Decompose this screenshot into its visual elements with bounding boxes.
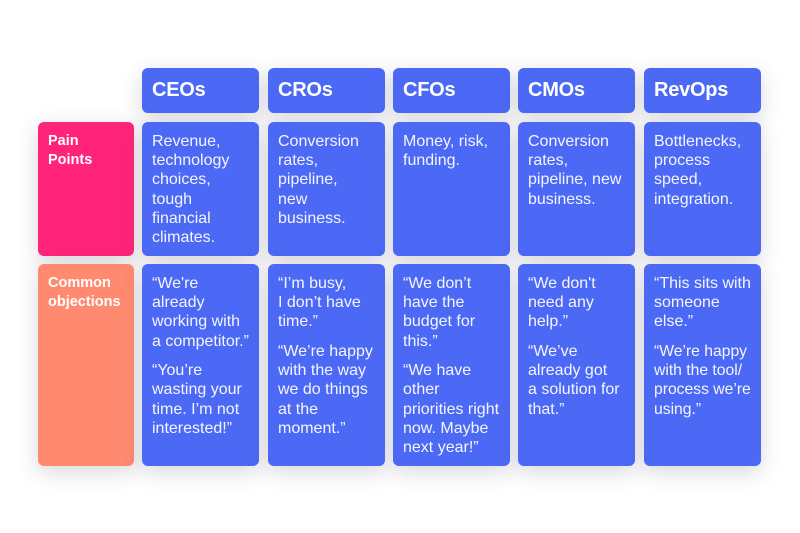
objections: CROs: moment.”	[278, 420, 346, 437]
pain points: RevOps: speed,	[654, 171, 702, 188]
objections: CFOs: “We have	[403, 362, 471, 379]
header: CFOs	[393, 68, 510, 113]
pain points: CEOs: financial	[152, 210, 211, 227]
objections: CFOs: “We don’t	[403, 275, 471, 292]
objections: CROs: I don’t have	[278, 294, 361, 311]
objections: CROs	[268, 264, 385, 466]
pain points: CROs: rates,	[278, 152, 318, 169]
objections: RevOps: “This sits with	[654, 275, 751, 292]
header: CROs	[268, 68, 385, 113]
pain points: CFOs: funding.	[403, 152, 460, 169]
pain points: CROs: new	[278, 191, 307, 208]
objections: RevOps: process we’re	[654, 381, 751, 398]
objections: CROs: with the way	[278, 362, 366, 379]
objections: CMOs	[518, 264, 635, 466]
pain points: CMOs	[518, 122, 635, 256]
pain points: RevOps	[644, 122, 761, 256]
objections: CMOs: already got	[528, 362, 607, 379]
pain points: CEOs: technology	[152, 152, 229, 169]
objections: CEOs: “We're	[152, 275, 198, 292]
objections: CEOs: interested!”	[152, 420, 232, 437]
objections: CMOs: “We’ve	[528, 343, 578, 360]
pain points: CFOs: Money, risk,	[403, 133, 488, 150]
pain points: CEOs: Revenue,	[152, 133, 220, 150]
objections: CMOs: need any	[528, 294, 594, 311]
pain points: CROs: business.	[278, 210, 346, 227]
pain points: CMOs: business.	[528, 191, 596, 208]
pain points: CMOs: pipeline, new	[528, 171, 621, 188]
objections: RevOps: using.”	[654, 401, 701, 418]
objections: RevOps	[644, 264, 761, 466]
objections: CEOs: working with	[152, 313, 240, 330]
pain points: CEOs	[142, 122, 259, 256]
objections: CMOs: “We don't	[528, 275, 596, 292]
header: CFOs: CFOs	[403, 79, 455, 101]
objections: CROs: time.”	[278, 313, 318, 330]
objections: CEOs	[142, 264, 259, 466]
pain points: CEOs: climates.	[152, 229, 215, 246]
pain points: RevOps: Bottlenecks,	[654, 133, 741, 150]
header: CMOs	[518, 68, 635, 113]
pain points: CFOs	[393, 122, 510, 256]
objections: CEOs: time. I’m not	[152, 401, 239, 418]
row label: Common objections	[38, 264, 134, 466]
row label: Pain Points: Pain	[48, 133, 79, 149]
row label: Pain Points: Points	[48, 152, 92, 168]
objections: CFOs: budget for	[403, 313, 475, 330]
objections: CROs: we do things	[278, 381, 368, 398]
objections: CMOs: that.”	[528, 401, 564, 418]
pain points: RevOps: process	[654, 152, 710, 169]
objections: CROs: at the	[278, 401, 318, 418]
row label: Common objections: objections	[48, 294, 121, 310]
pain points: RevOps: integration.	[654, 191, 733, 208]
header: CROs: CROs	[278, 79, 333, 101]
pain points: CROs: Conversion	[278, 133, 359, 150]
objections: CEOs: wasting your	[152, 381, 242, 398]
pain points: CROs	[268, 122, 385, 256]
objections: CEOs: “You’re	[152, 362, 202, 379]
objections: RevOps: with the tool/	[654, 362, 742, 379]
objections: CFOs	[393, 264, 510, 466]
header: RevOps	[644, 68, 761, 113]
objections: CROs: “We’re happy	[278, 343, 373, 360]
objections: CMOs: a solution for	[528, 381, 620, 398]
objections: CFOs: priorities right	[403, 401, 499, 418]
pain points: CMOs: rates,	[528, 152, 568, 169]
pain points: CROs: pipeline,	[278, 171, 338, 188]
objections: CFOs: next year!”	[403, 439, 479, 456]
objections: RevOps: someone	[654, 294, 720, 311]
objections: RevOps: “We’re happy	[654, 343, 747, 360]
objections: CROs: “I’m busy,	[278, 275, 346, 292]
objections: CFOs: now. Maybe	[403, 420, 488, 437]
pain points: CEOs: tough	[152, 191, 192, 208]
header: CMOs: CMOs	[528, 79, 585, 101]
objections: CEOs: already	[152, 294, 204, 311]
row label: Common objections: Common	[48, 275, 111, 291]
header: CEOs: CEOs	[152, 79, 205, 101]
header: CEOs	[142, 68, 259, 113]
objections: CMOs: help.”	[528, 313, 568, 330]
row label: Pain Points	[38, 122, 134, 256]
header: RevOps: RevOps	[654, 79, 728, 101]
objections: CFOs: other	[403, 381, 439, 398]
pain points: CEOs: choices,	[152, 171, 211, 188]
objections: CFOs: have the	[403, 294, 464, 311]
pain points: CMOs: Conversion	[528, 133, 609, 150]
objections: CFOs: this.”	[403, 333, 438, 350]
objections: CEOs: a competitor.”	[152, 333, 249, 350]
objections: RevOps: else.”	[654, 313, 693, 330]
